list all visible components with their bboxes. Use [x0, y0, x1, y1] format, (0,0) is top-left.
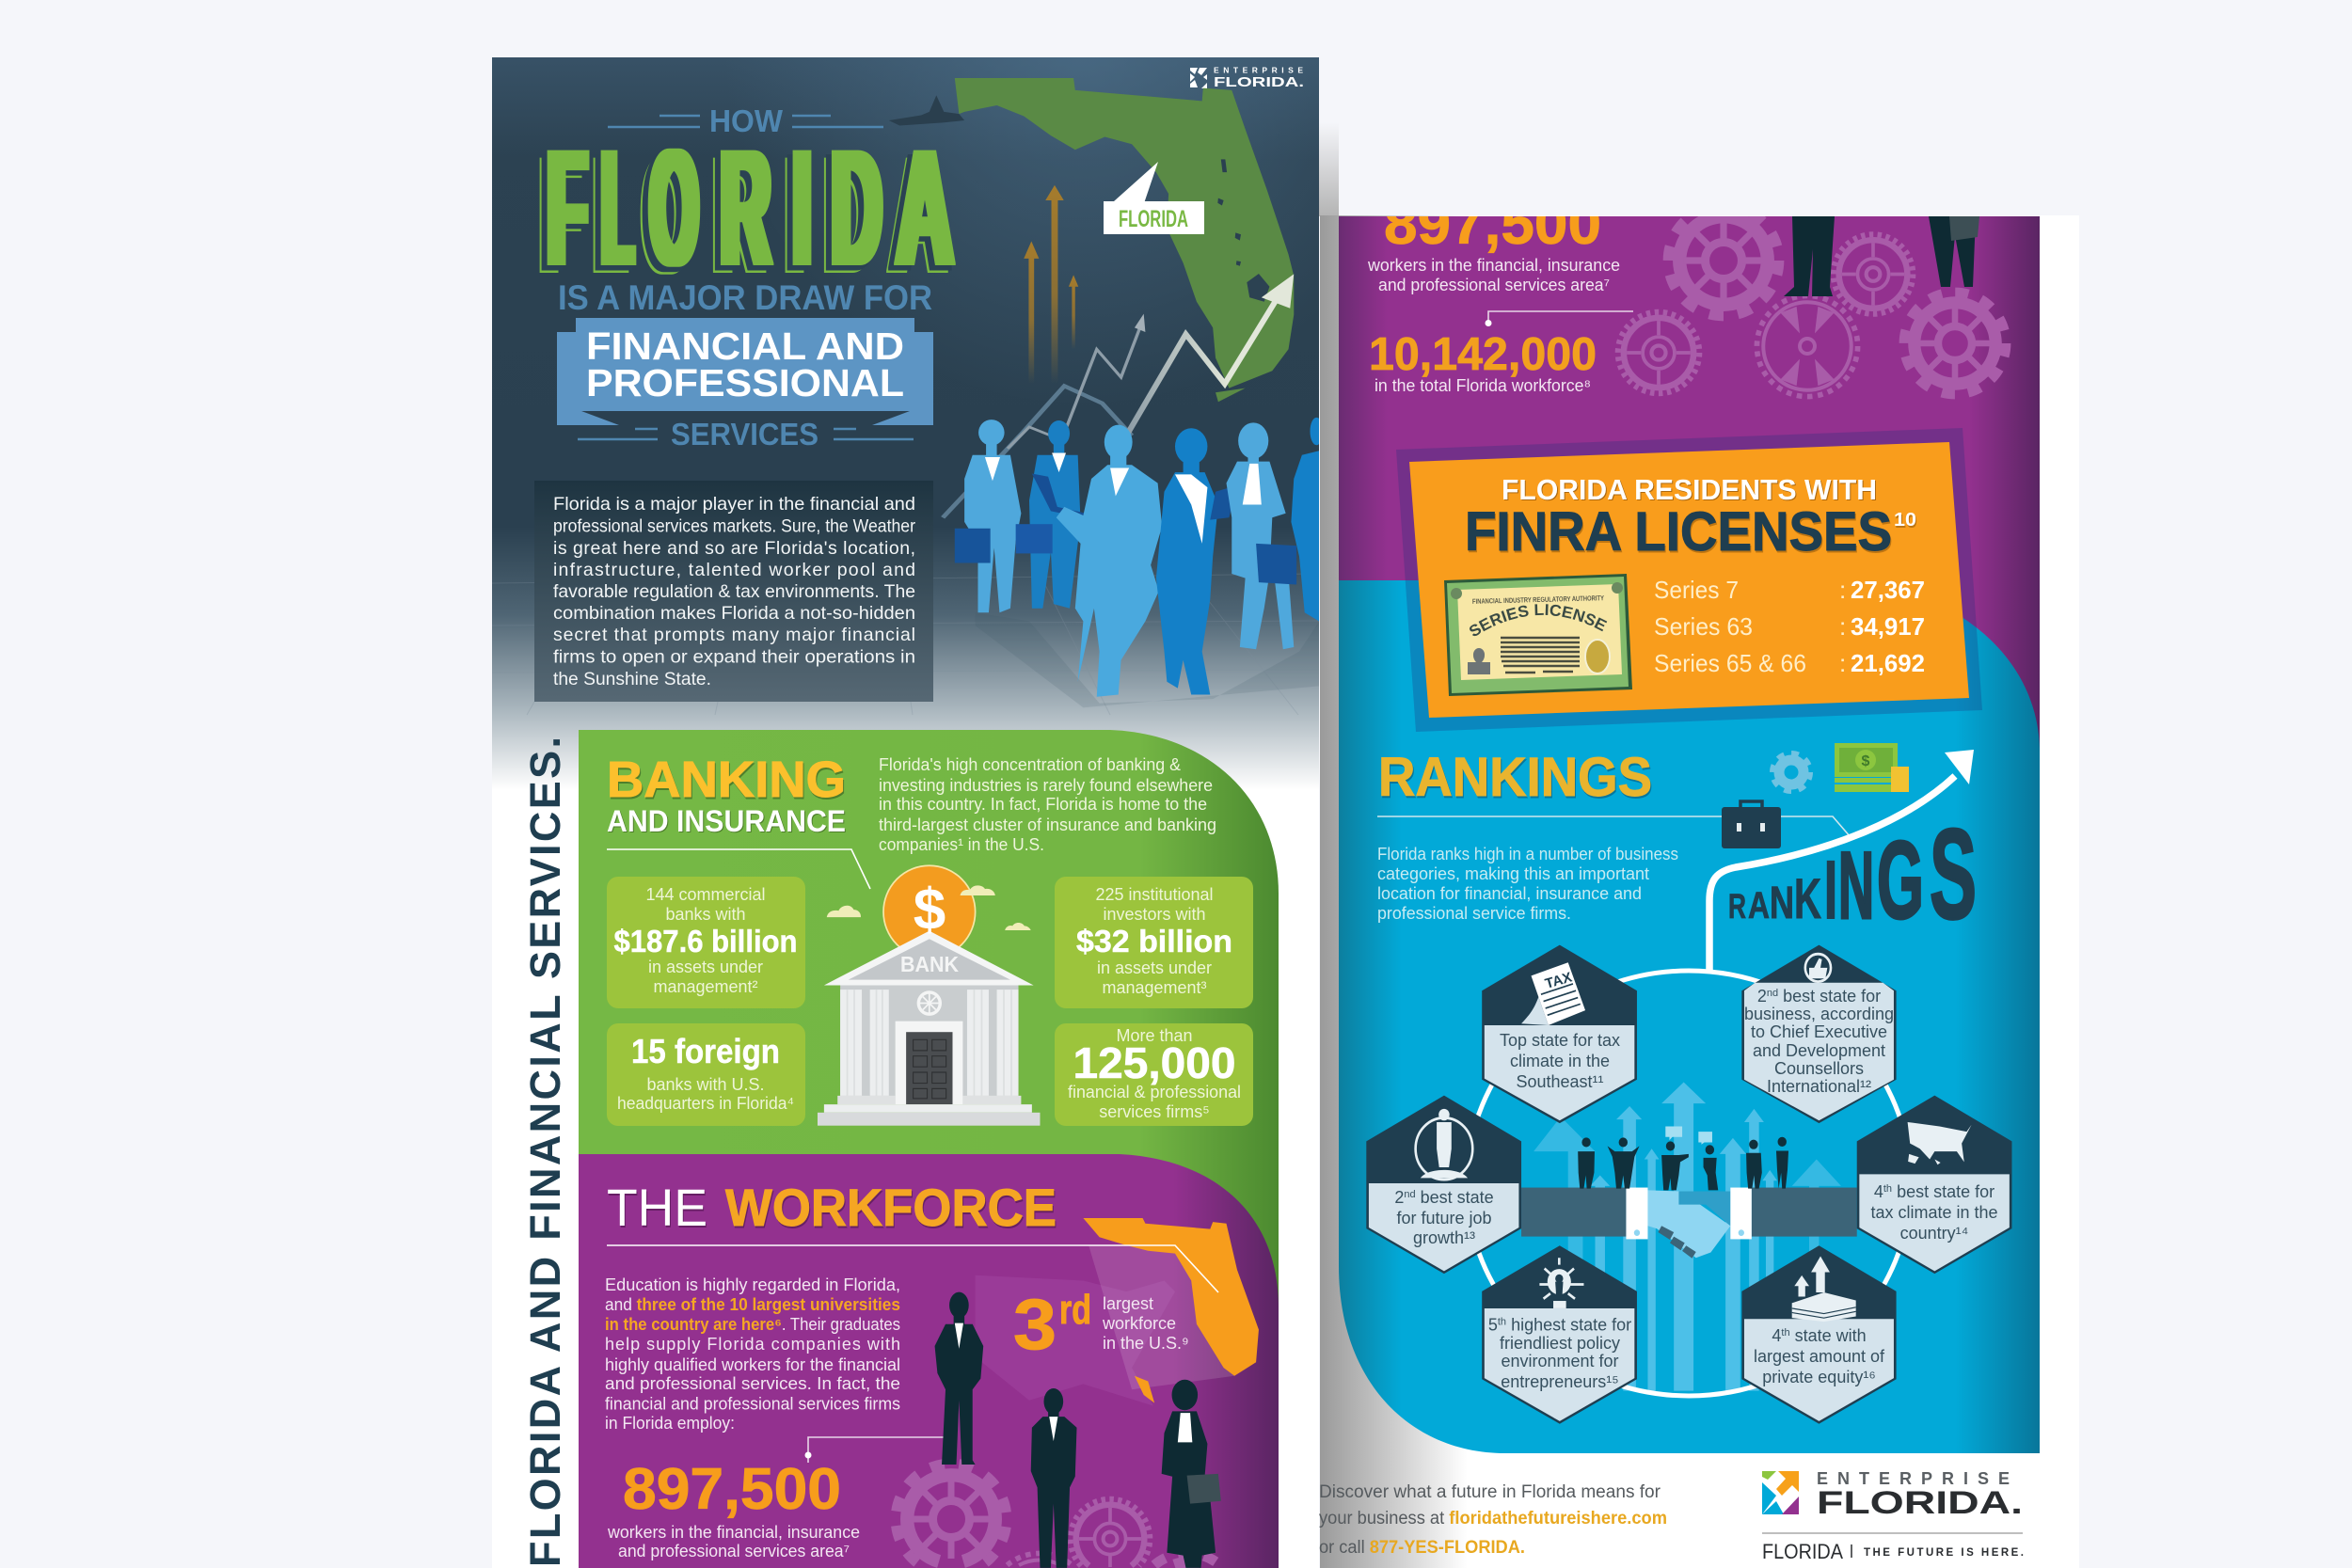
stat box: commercial banks: management² [653, 977, 758, 996]
connector line [607, 1245, 1218, 1292]
logo: Enterprise Florida [1762, 1469, 2023, 1521]
table: series counts: : [1839, 576, 1846, 604]
icon: briefcase [1722, 801, 1781, 848]
stat box: commercial banks [607, 877, 805, 1008]
hexagon: future job growth: for future job [1396, 1209, 1492, 1227]
title: FLORIDA extruded wordmark: D [827, 121, 877, 305]
hexagon: tax climate [1482, 945, 1637, 1123]
text block: call to action: or call 877-YES-FLORIDA. [1319, 1538, 1525, 1558]
stat box: commercial banks: banks with [665, 905, 746, 924]
stat: total workforce: 10,142,000 [1369, 329, 1597, 380]
heading: Florida residents with: FLORIDA RESIDENTS WITH [1502, 473, 1877, 506]
hexagon: friendliest policy environment [1482, 1245, 1637, 1424]
hexagon: friendliest policy environment: highest state for [1506, 1315, 1631, 1334]
text block: rankings intro: Florida ranks high in a number of business [1377, 844, 1678, 863]
heading: FINRA licenses: FINRA LICENSES [1465, 501, 1892, 562]
stat box: foreign banks: headquarters in Florida⁴ [617, 1094, 794, 1113]
title: FLORIDA extruded wordmark: A [889, 124, 946, 308]
text block: banking intro: in this country. In fact, Florida is home to the [879, 795, 1207, 814]
icon: gold up arrows [1024, 185, 1078, 384]
tagline: Florida the future is here [1762, 1540, 2024, 1563]
hexagon: future job growth: best state [1416, 1188, 1494, 1207]
icon: small gear [1772, 753, 1810, 791]
hexagon: friendliest policy environment: 5 [1488, 1315, 1498, 1334]
heading: FINRA licenses: 10 [1894, 510, 1916, 531]
heading: the workforce: THE [607, 1178, 707, 1237]
hexagon: future job growth [1366, 1096, 1521, 1274]
table: series counts: Series 63 [1654, 612, 1753, 641]
text block: workforce intro: in Florida employ: [605, 1414, 735, 1433]
illustration: RANKINGS growing letters: N [1770, 879, 1794, 928]
stat: 3rd largest workforce: largest [1103, 1294, 1153, 1313]
hexagon: best state for business: nd [1767, 988, 1778, 999]
hexagon: private equity [1741, 1245, 1897, 1424]
panel: left poster page: A [897, 117, 953, 300]
panel: left poster page [492, 57, 1323, 1568]
text block: banking intro: third-largest cluster of insurance and banking [879, 816, 1216, 834]
ribbon banner: FINANCIAL AND [586, 325, 904, 368]
table: series counts: : [1839, 612, 1846, 641]
icon: money stack: $ [1862, 753, 1870, 769]
panel: rankings background [1339, 580, 2040, 1453]
icon: bank building: $ [914, 878, 946, 942]
stat: 897,500 continued: and professional services area⁷ [1378, 276, 1610, 294]
arrow: rising white arrow [1709, 750, 1974, 970]
hexagon: private equity: th [1781, 1327, 1790, 1338]
hexagon: private equity: state with [1790, 1326, 1867, 1345]
panel: the workforce [579, 1154, 1279, 1568]
illustration: handshake bridge [1521, 1188, 1857, 1259]
hexagon: best state for business: Counsellors [1774, 1059, 1864, 1078]
title: FLORIDA extruded wordmark: I [786, 124, 803, 308]
hexagon: future job growth: growth¹³ [1413, 1228, 1475, 1247]
hexagon: tax climate in the country: th [1883, 1183, 1892, 1195]
logo: Enterprise Florida small [1190, 68, 1303, 88]
icon: series license certificate: SERIES LICENSE [1470, 604, 1607, 636]
title: HOW with rules [608, 109, 883, 132]
text block: banking intro: Florida's high concentration of banking & [879, 755, 1181, 774]
icon: money stack [1835, 743, 1909, 792]
map: US with Florida highlighted [976, 1218, 1259, 1406]
illustration: RANKINGS growing letters [1728, 802, 1977, 945]
connector line [607, 849, 870, 889]
stat box: professional firms: 125,000 [1073, 1038, 1236, 1087]
table: series counts: 34,917 [1851, 612, 1925, 641]
divider [1762, 1532, 2023, 1534]
stat: 897,500 continued: workers in the financial, insurance [1367, 256, 1620, 275]
hexagon: tax climate in the country: country¹⁴ [1900, 1224, 1968, 1243]
title: FLORIDA extruded wordmark: I [793, 117, 811, 300]
map: Florida state green [889, 78, 1294, 402]
table: series counts [1654, 576, 1925, 677]
stat: 3rd largest workforce: rd [1059, 1287, 1091, 1333]
gears [896, 1464, 1220, 1567]
stat: 897,500 continued [1367, 192, 1620, 294]
title: FLORIDA extruded wordmark: O [645, 121, 693, 305]
heading: banking: BANKING [607, 752, 846, 808]
workforce continuation background [1339, 216, 2040, 969]
gears [1618, 205, 2006, 397]
stat: 897,500 workers: and professional services area⁷ [618, 1542, 850, 1560]
text block: call to action: your business at floridathefutureishere.com [1319, 1509, 1667, 1528]
icon: bank building: BANK [900, 952, 959, 976]
logo: Enterprise Florida: FLORIDA. [1817, 1485, 2023, 1521]
hexagon: friendliest policy environment: friendliest policy [1500, 1334, 1620, 1353]
title: FLORIDA extruded wordmark: F [540, 124, 580, 308]
hexagon: tax climate in the country: best state for [1892, 1182, 1994, 1201]
illustration: up arrows behind handshake [1534, 1083, 1841, 1391]
stat box: foreign banks: 15 foreign [631, 1032, 780, 1070]
tagline: Florida the future is here: FLORIDA [1762, 1540, 1843, 1563]
stat box: institutional investors: 225 institutional [1095, 885, 1214, 904]
stat: 3rd largest workforce: 3 [1013, 1285, 1057, 1365]
illustration: RANKINGS growing letters: I [1824, 845, 1837, 936]
stat box: professional firms [1055, 1023, 1253, 1126]
text block: banking intro: companies¹ in the U.S. [879, 835, 1044, 854]
hexagon: friendliest policy environment: th [1498, 1317, 1506, 1328]
hexagon: best state for business: and Development [1753, 1041, 1885, 1060]
title: services with rules: SERVICES [671, 417, 818, 451]
text block: intro: is great here and so are Florida's location, [553, 538, 915, 559]
hexagon: tax climate: Southeast¹¹ [1516, 1072, 1604, 1091]
hexagon: best state for business: best state for [1778, 987, 1881, 1006]
heading: the workforce [608, 1189, 1056, 1228]
shadow of left page [1319, 122, 1339, 216]
text block: intro: firms to open or expand their operations in [553, 647, 915, 668]
stat: 897,500 workers [607, 1457, 860, 1560]
ring connecting hexagons [1467, 971, 1911, 1396]
connector with dot [805, 1437, 954, 1463]
panel: FINRA licenses card [1396, 428, 1982, 732]
hexagon: best state for business: to Chief Executive [1751, 1022, 1887, 1041]
text block: workforce intro: Education is highly regarded in Florida, [605, 1275, 900, 1294]
hexagon: friendliest policy environment: environment for [1501, 1352, 1619, 1370]
header background [492, 57, 1319, 1568]
table: series counts: 21,692 [1851, 649, 1925, 677]
hexagon: tax climate in the country: 4 [1874, 1182, 1883, 1201]
text block: rankings intro: categories, making this an important [1377, 863, 1649, 883]
text block: banking intro: investing industries is rarely found elsewhere [879, 776, 1213, 795]
stat box: institutional investors: management³ [1102, 978, 1207, 997]
title: FLORIDA extruded wordmark: R [716, 121, 766, 305]
illustration: RANKINGS growing letters: A [1748, 885, 1770, 927]
illustration: RANKINGS growing letters: G [1877, 818, 1924, 942]
title: FLORIDA extruded wordmark: I [788, 121, 806, 305]
callout: Florida label [1104, 162, 1204, 234]
stat: 3rd largest workforce: in the U.S.⁹ [1103, 1334, 1189, 1353]
title: FLORIDA extruded wordmark: L [597, 121, 628, 305]
connector line [1377, 816, 1851, 837]
title: FLORIDA extruded wordmark: F [548, 117, 587, 300]
title: FLORIDA extruded wordmark [540, 149, 956, 275]
logo: Enterprise Florida small: ENTERPRISE [1214, 66, 1303, 75]
text block: workforce intro: and professional services. In fact, the [605, 1374, 900, 1393]
hexagon: private equity: largest amount of [1754, 1347, 1885, 1366]
stat: 897,500 workers: workers in the financial, insurance [607, 1523, 860, 1542]
illustration: small business people [1578, 1126, 1788, 1190]
illustration: business silhouettes [935, 1292, 1221, 1568]
hexagon: best state for business: business, according [1744, 1005, 1894, 1023]
hexagon: future job growth: nd [1404, 1189, 1416, 1200]
panel: right poster page [1319, 215, 2079, 1568]
text block: call to action: Discover what a future in Florida means for [1319, 1482, 1661, 1502]
title: FLORIDA extruded wordmark: A [892, 121, 948, 305]
text block: intro: favorable regulation & tax environments. The [553, 581, 915, 602]
stat box: institutional investors [1055, 877, 1253, 1008]
text block: call to action [1319, 1482, 1667, 1558]
stat box: foreign banks: banks with U.S. [646, 1075, 765, 1094]
white page sheet [1320, 215, 2079, 1568]
logo: Enterprise Florida: ENTERPRISE [1817, 1469, 2010, 1488]
hexagon: best state for business: International¹² [1767, 1077, 1871, 1096]
table: series counts: : [1839, 649, 1846, 677]
title: FLORIDA extruded wordmark: L [595, 124, 626, 308]
title: FLORIDA extruded wordmark: O [650, 117, 698, 300]
connector with dot [1485, 311, 1633, 326]
text block: rankings intro: professional service firms. [1377, 903, 1571, 923]
text block: rankings intro: location for financial, insurance and [1377, 883, 1642, 903]
illustration: RANKINGS growing letters: N [1838, 833, 1874, 939]
stat box: commercial banks: 144 commercial [645, 885, 766, 904]
table: series counts: Series 65 & 66 [1654, 649, 1806, 677]
hexagon: tax climate in the country [1857, 1096, 2011, 1274]
title: FLORIDA extruded wordmark: F [543, 121, 582, 305]
callout: Florida label: FLORIDA [1119, 206, 1188, 232]
hexagon: tax climate: Top state for tax [1500, 1031, 1620, 1050]
title: FLORIDA extruded wordmark: D [824, 124, 874, 308]
title: FLORIDA extruded wordmark: R [713, 124, 763, 308]
logo: Enterprise Florida small: FLORIDA. [1214, 74, 1304, 90]
text block: workforce intro: and three of the 10 largest universities [605, 1295, 900, 1314]
title: services with rules [578, 423, 914, 446]
table: series counts: Series 7 [1654, 576, 1739, 604]
stat box: institutional investors: $32 billion [1076, 924, 1232, 958]
hexagon: future job growth: 2 [1394, 1188, 1404, 1207]
stat box: foreign banks [607, 1023, 805, 1126]
hexagon: best state for business: 2 [1757, 987, 1767, 1006]
text block: rankings intro [1377, 844, 1678, 923]
stat: 897,500 workers: 897,500 [623, 1457, 841, 1522]
stat: 3rd largest workforce: workforce [1102, 1314, 1176, 1333]
text block: intro [534, 481, 933, 702]
stat box: professional firms: financial & professional [1068, 1083, 1241, 1101]
chart: rising lines [943, 274, 1294, 517]
panel: vertical caption: FLORIDA AND FINANCIAL SERVICES. [521, 736, 569, 1567]
ribbon banner [557, 318, 933, 425]
panel: banking and insurance [579, 730, 1279, 1317]
hexagon: tax climate in the country: tax climate in the [1870, 1203, 1998, 1222]
stat box: institutional investors: in assets under [1097, 958, 1212, 977]
ribbon banner: PROFESSIONAL [586, 361, 904, 404]
text block: intro: professional services markets. Sure, the Weather [553, 515, 915, 536]
text block: workforce intro: help supply Florida companies with [605, 1335, 900, 1354]
icon: bank building [818, 865, 1040, 1126]
hexagon: private equity: private equity¹⁶ [1762, 1368, 1876, 1386]
stat box: professional firms: services firms⁵ [1099, 1102, 1210, 1121]
icon: series license certificate [1444, 574, 1632, 696]
title: FLORIDA extruded wordmark: D [832, 117, 882, 300]
text block: intro: infrastructure, talented worker pool and [553, 560, 915, 580]
stat box: professional firms: More than [1116, 1026, 1193, 1045]
hexagon: private equity: 4 [1772, 1326, 1781, 1345]
table: series counts: 27,367 [1851, 576, 1925, 604]
heading: the workforce: WORKFORCE [725, 1178, 1057, 1237]
text block: workforce intro: highly qualified workers for the financial [605, 1355, 900, 1374]
stat box: commercial banks: $187.6 billion [613, 924, 798, 958]
text block: workforce intro [605, 1275, 900, 1433]
stat: 897,500 continued: 897,500 [1384, 192, 1601, 257]
hexagon: tax climate: TAX [1543, 970, 1574, 992]
title: HOW with rules: HOW [709, 103, 784, 138]
text block: intro: Florida is a major player in the financial and [553, 494, 915, 515]
title: FLORIDA extruded wordmark: L [602, 117, 633, 300]
stat box: commercial banks: in assets under [648, 958, 763, 976]
stat box: institutional investors: investors with [1103, 905, 1206, 924]
title: FLORIDA extruded wordmark: R [721, 117, 771, 300]
title: is a major draw for: IS A MAJOR DRAW FOR [558, 278, 932, 317]
tagline: Florida the future is here: THE FUTURE IS HERE. [1864, 1547, 2024, 1559]
title: FLORIDA extruded wordmark: O [643, 124, 691, 308]
heading: and insurance: AND INSURANCE [607, 804, 846, 838]
stat: 3rd largest workforce [1013, 1285, 1189, 1365]
text block: intro: combination makes Florida a not-so-hidden [553, 603, 915, 624]
illustration: RANKINGS growing letters: K [1794, 867, 1821, 930]
icon: series license certificate: FINANCIAL INDUSTRY REGULATORY AUTHORITY [1472, 594, 1604, 606]
illustration: RANKINGS growing letters: S [1930, 802, 1977, 945]
illustration: RANKINGS growing letters: R [1728, 887, 1746, 926]
text block: intro: the Sunshine State. [553, 669, 711, 689]
hexagon: best state for business [1741, 945, 1897, 1123]
heading: rankings: RANKINGS [1378, 747, 1652, 808]
text block: banking intro [879, 755, 1216, 854]
illustration: business people in blue [955, 418, 1323, 707]
text block: workforce intro: in the country are here⁶. Their graduates [605, 1315, 900, 1334]
stat: total workforce: in the total Florida workforce⁸ [1375, 376, 1591, 395]
text block: workforce intro: financial and professional services firms [605, 1394, 900, 1413]
hexagon: tax climate: climate in the [1510, 1052, 1610, 1070]
text block: intro: secret that prompts many major financial [553, 625, 915, 645]
illustration: silhouette legs [1784, 216, 1979, 296]
hexagon: friendliest policy environment: entrepreneurs¹⁵ [1501, 1372, 1619, 1391]
